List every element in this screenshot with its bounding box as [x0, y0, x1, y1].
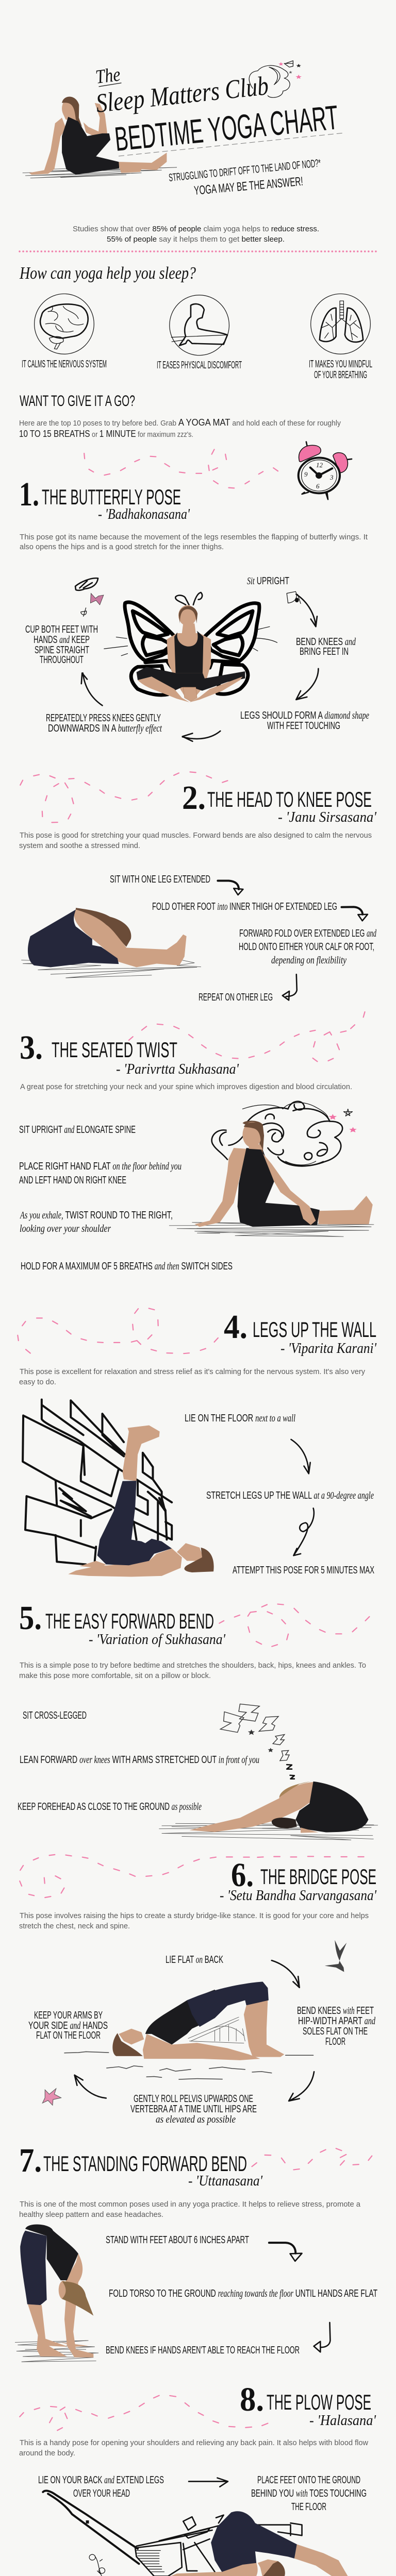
title: The: The — [94, 63, 122, 88]
step: fold other foot: FOLD OTHER FOOT into INNER THIGH OF EXTENDED LEG — [152, 901, 337, 912]
step: feet touching: WITH FEET TOUCHING — [267, 720, 340, 732]
description line 1: This pose is excellent for relaxation and stress relief as it's calming for the nervous system. It's also very — [20, 1367, 365, 1376]
pose number 3: 3. — [20, 1029, 43, 1066]
sanskrit name: - 'Badhakonasana' — [98, 506, 190, 522]
pose number 8: 8. — [240, 2381, 264, 2418]
sanskrit name: - 'Janu Sirsasana' — [278, 809, 377, 825]
instructions line 1: Here are the top 10 poses to try before bed. Grab A YOGA MAT and hold each of these for roughly — [19, 417, 341, 428]
step: hip width apart: HIP-WIDTH APART and — [298, 2015, 376, 2027]
description line 2: also opens the hips and is a good stretch for the inner thighs. — [20, 543, 224, 551]
sanskrit name: - 'Parivrtta Sukhasana' — [116, 1061, 239, 1077]
step: press knees: REPEATEDLY PRESS KNEES GENTLY — [46, 713, 161, 724]
description line 2: around the body. — [19, 2449, 75, 2458]
dashed trail 8 — [20, 2396, 268, 2430]
step: sit one leg extended: SIT WITH ONE LEG EXTENDED — [110, 874, 210, 885]
step: the floor: THE FLOOR — [291, 2501, 326, 2513]
arrow: to press knees — [183, 731, 220, 741]
panel: pose 4 legs up the wall — [19, 1308, 377, 1577]
illustration: butterfly wings and seated woman — [104, 592, 277, 702]
description line 1: This is a simple pose to try before bedtime and stretches the shoulders, back, hips, knees and ankles. To — [20, 1661, 366, 1670]
step: over your head: OVER YOUR HEAD — [73, 2488, 130, 2499]
photo: standing forward bend — [15, 2224, 98, 2362]
step: butterfly effect: DOWNWARDS IN A butterfly effect — [48, 723, 162, 734]
description line 1: This pose got its name because the movement of the legs resembles the flapping of butterfly wings. It — [20, 533, 368, 541]
icon: brain in oval — [35, 294, 94, 354]
step: throughout: THROUGHOUT — [40, 654, 84, 666]
dashed title rule — [119, 133, 344, 156]
clock numbers: 6 — [316, 482, 320, 490]
step: lean forward: LEAN FORWARD over knees WITH ARMS STRETCHED OUT in front of you — [20, 1754, 259, 1766]
pose number 2: 2. — [182, 779, 206, 817]
arrow: to cup feet — [81, 673, 102, 705]
arrow: to fold torso — [269, 2243, 302, 2261]
panel: pose 7 standing forward bend — [15, 2142, 377, 2362]
step: cup both feet: CUP BOTH FEET WITH — [25, 624, 98, 635]
step: stand with feet: STAND WITH FEET ABOUT 6 INCHES APART — [106, 2234, 249, 2246]
clock numbers: 12 — [316, 461, 323, 469]
description line 1: This pose is good for stretching your quad muscles. Forward bends are also designed to calm the nervous — [20, 831, 372, 840]
description: A great pose for stretching your neck and your spine which improves digestion and blood circulation. — [20, 1082, 352, 1091]
step: flat on floor: FLAT ON THE FLOOR — [36, 2030, 101, 2041]
icon: cobra pose in oval — [170, 295, 229, 355]
illustration: plough — [43, 2491, 302, 2576]
step: place right hand: PLACE RIGHT HAND FLAT on the floor behind you — [19, 1161, 182, 1172]
illustration: curl with stars — [248, 1101, 353, 1122]
tagline: yoga may be the answer: YOGA MAY BE THE ANSWER! — [193, 175, 304, 198]
dashed trail 5 — [219, 1604, 369, 1647]
arrow: to fold foot — [218, 880, 243, 895]
dashed trail 6 — [20, 1855, 364, 1897]
arrow: to bend knees — [296, 594, 317, 626]
description line 2: system and soothe a stressed mind. — [19, 841, 140, 850]
description line 1: This is a handy pose for opening your shoulders and relieving any back pain. It also helps with blood flow — [20, 2438, 368, 2447]
icon: lungs in oval — [311, 294, 370, 354]
description line 2: easy to do. — [19, 1378, 56, 1386]
dashed trail 2 — [20, 772, 227, 822]
step: exhale and twist: As you exhale, TWIST ROUND TO THE RIGHT, — [20, 1210, 173, 1221]
step: lie flat on back: LIE FLAT on BACK — [166, 1954, 223, 1965]
step: looking over shoulder: looking over your shoulder — [20, 1223, 111, 1234]
sanskrit name: - 'Variation of Sukhasana' — [89, 1632, 226, 1648]
arrow: to forward fold — [341, 907, 368, 921]
pose number 7: 7. — [19, 2142, 42, 2179]
clock numbers: 9 — [304, 470, 308, 478]
step: as elevated as possible: as elevated as possible — [156, 2114, 236, 2125]
icon: butterflies and bee — [75, 578, 301, 616]
intro statistic line 1: Studies show that over 85% of people claim yoga helps to reduce stress. — [73, 225, 319, 233]
icon: alarm clock — [299, 442, 352, 499]
intro statistic line 2: 55% of people say it helps them to get better sleep. — [107, 235, 285, 244]
step: bend knees feet: BEND KNEES with FEET — [297, 2005, 374, 2016]
panel: want to give it a go — [19, 393, 352, 499]
instructions line 2: 10 TO 15 BREATHS or 1 MINUTE for maximum zzz's. — [19, 429, 193, 439]
step: stretch legs: STRETCH LEGS UP THE WALL at a 90-degree angle — [206, 1490, 374, 1501]
dotted divider — [20, 250, 376, 252]
header panel — [23, 61, 344, 244]
panel: how yoga helps: IT EASES PHYSICAL DISCOMFORT — [157, 360, 242, 371]
step: your side hands: YOUR SIDE and HANDS — [28, 2020, 108, 2031]
panel: pose 8 plow — [19, 2381, 376, 2576]
step: spine straight: SPINE STRAIGHT — [35, 645, 89, 656]
description line 2: stretch the chest, neck and spine. — [19, 1922, 130, 1930]
step: sit cross-legged: SIT CROSS-LEGGED — [23, 1710, 87, 1721]
step: legs diamond: LEGS SHOULD FORM A diamond shape — [240, 710, 369, 721]
dashed trail 4 — [18, 1308, 218, 1353]
title underline — [99, 83, 121, 87]
description line 2: healthy sleep pattern and ease headaches. — [19, 2210, 163, 2219]
step: lie on your back: LIE ON YOUR BACK and EXTEND LEGS — [38, 2475, 164, 2486]
photo: plow pose — [141, 2511, 350, 2576]
step: floor: FLOOR — [325, 2036, 345, 2047]
arrow: to repeat — [283, 974, 297, 1000]
description line 1: This is one of the most common poses used in any yoga practice. It helps to relieve stress, promote a — [20, 2200, 361, 2209]
step: roll pelvis: GENTLY ROLL PELVIS UPWARDS ONE — [134, 2093, 253, 2105]
pose title: THE EASY FORWARD BEND — [45, 1609, 214, 1633]
step: sit upright, elongate: SIT UPRIGHT and ELONGATE SPINE — [19, 1124, 136, 1136]
panel: pose 5 easy forward bend — [18, 1599, 378, 1840]
arrow: to stretch legs — [291, 1439, 310, 1473]
step: lie on the floor: LIE ON THE FLOOR next to a wall — [185, 1413, 295, 1424]
dashed trail 3 — [129, 1012, 365, 1061]
step: bend knees: BEND KNEES and — [296, 636, 356, 648]
panel: pose 3 seated twist — [19, 1029, 374, 1272]
description line 2: make this pose more comfortable, sit on a pillow or block. — [19, 1671, 211, 1680]
icon: sleeping Zs — [220, 1704, 294, 1779]
illustration: curly cloud — [212, 1103, 357, 1166]
icon: cloud, moon and stars — [249, 61, 302, 97]
pose number 4: 4. — [224, 1308, 248, 1346]
pose number 1: 1. — [19, 476, 39, 513]
pose title: THE BUTTERFLY POSE — [42, 485, 181, 509]
arrow: to place feet — [189, 2478, 228, 2487]
pose title: THE SEATED TWIST — [52, 1038, 177, 1062]
step: bring feet in: BRING FEET IN — [300, 646, 349, 657]
photo: woman seated twist with scribble floor — [23, 97, 177, 178]
sanskrit name: - 'Uttanasana' — [188, 2173, 263, 2189]
arrows: lower cycle — [75, 2072, 314, 2101]
arrow: to legs diamond — [296, 669, 318, 700]
description line 1: This pose involves raising the hips to create a sturdy bridge-like stance. It is good for your core and helps — [20, 1911, 369, 1920]
panel: pose 2 head to knee — [19, 779, 377, 1003]
pose number 5: 5. — [19, 1599, 42, 1637]
floor ripples — [64, 2052, 314, 2079]
clock numbers — [304, 461, 334, 490]
title: Sleep Matters Club: Sleep Matters Club — [94, 71, 270, 118]
step: left hand on knee: AND LEFT HAND ON RIGHT KNEE — [19, 1175, 126, 1186]
photo: easy forward bend — [159, 1782, 378, 1840]
panel: pose 6 bridge — [19, 1856, 377, 2125]
pose title: THE STANDING FORWARD BEND — [43, 2151, 247, 2176]
step: hold and switch: HOLD FOR A MAXIMUM OF 5 BREATHS and then SWITCH SIDES — [21, 1261, 233, 1272]
step: repeat on other leg: REPEAT ON OTHER LEG — [199, 992, 273, 1003]
heading: want to give it a go: WANT TO GIVE IT A GO? — [20, 393, 135, 410]
step: keep arms: KEEP YOUR ARMS BY — [34, 2010, 103, 2021]
icon: flower and ground — [86, 2554, 364, 2576]
pose number 6: 6. — [231, 1856, 254, 1894]
photo: seated twist — [169, 1121, 374, 1236]
icon: starfish — [42, 2089, 61, 2105]
panel: pose 1 butterfly — [19, 476, 369, 741]
step: keep forehead close: KEEP FOREHEAD AS CLOSE TO THE GROUND as possible — [18, 1801, 202, 1812]
sanskrit name: - 'Halasana' — [309, 2413, 376, 2429]
illustration: brick wall — [23, 1400, 172, 1564]
photo: forward fold over leg — [22, 908, 201, 978]
arrow: to bend knees — [314, 2323, 330, 2352]
sanskrit name: - 'Setu Bandha Sarvangasana' — [220, 1888, 377, 1904]
photo: bridge pose — [112, 1981, 284, 2060]
label: calms nervous system: IT CALMS THE NERVOUS SYSTEM — [22, 359, 107, 370]
dashed trail 1 — [84, 449, 278, 488]
step: depending on flexibility: depending on flexibility — [271, 955, 346, 966]
dashed trail 7 — [252, 2148, 372, 2170]
step: behind you: BEHIND YOU with TOES TOUCHING — [251, 2488, 367, 2499]
step: sit upright: Sit UPRIGHT — [247, 575, 289, 587]
step: hands and keep: HANDS and KEEP — [34, 634, 90, 646]
sanskrit name: - 'Viparita Karani' — [280, 1341, 377, 1357]
photo: legs up the wall — [68, 1425, 214, 1577]
panel: how yoga helps — [19, 264, 372, 381]
icon: seagull — [325, 1940, 346, 1972]
heading: how can yoga help: How can yoga help you sleep? — [19, 264, 196, 283]
clock numbers: 3 — [329, 473, 334, 481]
arrow: loop to attempt — [293, 1508, 314, 1555]
arrow: to bend knees — [272, 1960, 300, 1988]
step: vertebra at a time: VERTEBRA AT A TIME UNTIL HIPS ARE — [130, 2104, 257, 2115]
